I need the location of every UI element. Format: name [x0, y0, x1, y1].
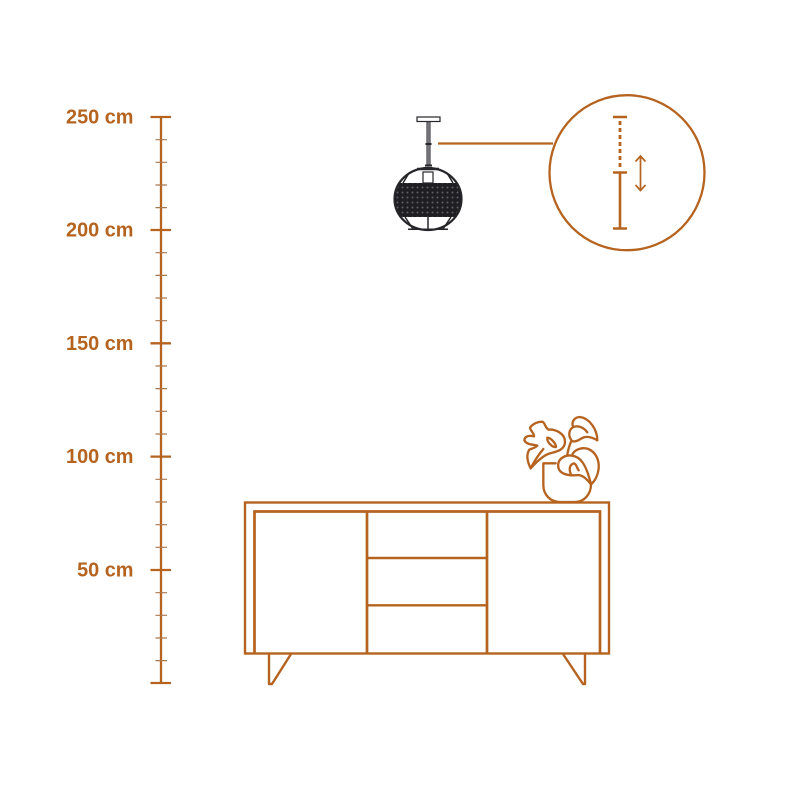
minor ticks — [156, 140, 167, 661]
fixed cord length — [613, 117, 627, 228]
drawer lines — [367, 558, 487, 605]
woven band — [394, 183, 462, 217]
plant in pot — [524, 417, 599, 502]
height scale — [150, 117, 171, 683]
ceiling plate — [417, 117, 440, 122]
circle outline — [550, 95, 704, 250]
label 50 cm: 50 cm — [77, 560, 134, 582]
door dividers — [367, 512, 487, 654]
scale labels — [66, 107, 134, 582]
stems — [567, 440, 572, 459]
label 100 cm: 100 cm — [66, 446, 134, 468]
left leaf — [524, 422, 565, 468]
cord — [427, 122, 430, 165]
label 200 cm: 200 cm — [66, 220, 134, 242]
pendant lamp — [394, 117, 462, 230]
lamp holder — [423, 172, 433, 183]
adjustable cord range dashed — [619, 121, 621, 170]
cabinet outer frame — [245, 502, 609, 654]
connector line — [438, 142, 553, 145]
sideboard — [245, 502, 609, 684]
left leg — [269, 654, 291, 684]
label 150 cm: 150 cm — [66, 333, 134, 355]
right leg — [563, 654, 585, 684]
cabinet inner frame — [254, 512, 600, 654]
pot — [543, 463, 591, 502]
left leaf vein and hole — [531, 438, 556, 468]
major ticks — [150, 117, 171, 683]
sphere frame — [394, 168, 462, 230]
detail circle — [550, 95, 704, 250]
label 250 cm: 250 cm — [66, 107, 134, 129]
top right leaf — [569, 417, 597, 441]
double arrow — [636, 156, 646, 190]
lower right leaf — [558, 448, 599, 484]
scale axis — [160, 117, 162, 683]
